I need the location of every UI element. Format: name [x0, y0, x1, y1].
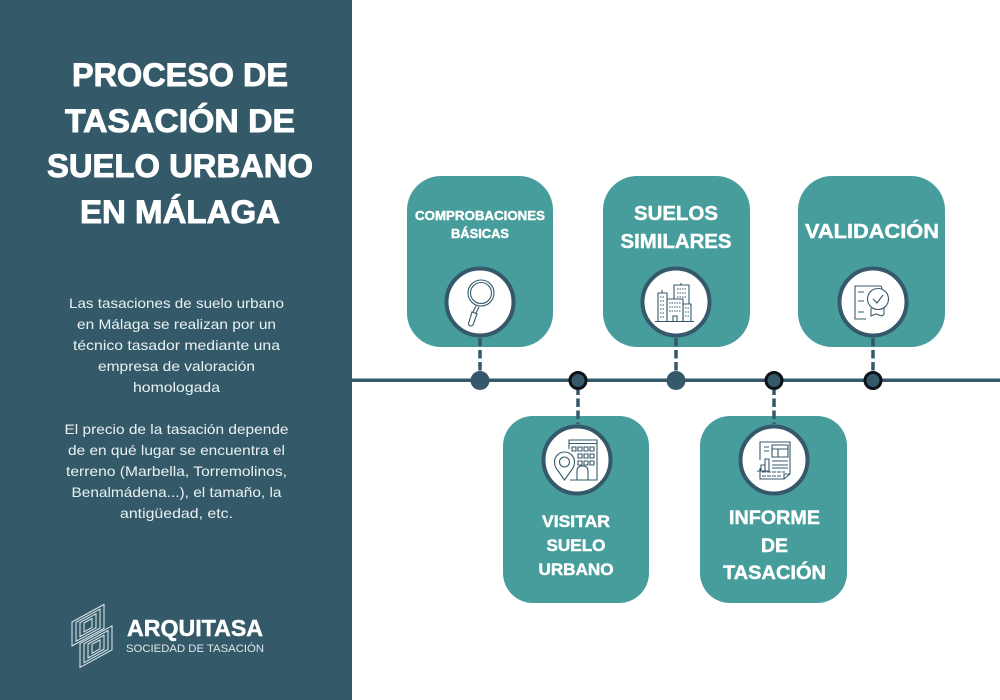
- heading: SUELO: [546, 537, 606, 555]
- heading: [723, 508, 826, 584]
- heading: [538, 513, 614, 579]
- icon: report: [740, 426, 808, 494]
- title: TASACIÓN DE: [65, 103, 295, 139]
- timeline: [352, 338, 1000, 424]
- heading: SIMILARES: [620, 231, 732, 253]
- text block: price paragraph: [64, 421, 289, 521]
- text block: price paragraph: El precio de la tasación depende: [64, 421, 289, 437]
- panel: informe de tasación: [700, 416, 847, 603]
- text block: intro paragraph: Las tasaciones de suelo urbano: [69, 295, 284, 311]
- timeline dot 1: [470, 371, 490, 390]
- text block: intro paragraph: [69, 295, 284, 395]
- panel: visitar suelo urbano: [503, 416, 649, 603]
- heading: SUELOS: [634, 203, 718, 225]
- panel: suelos similares: [603, 176, 750, 347]
- icon: logo mark: [72, 604, 112, 667]
- heading: BÁSICAS: [451, 226, 509, 241]
- icon: certificate: [840, 268, 906, 336]
- heading: [415, 208, 545, 241]
- heading: VISITAR: [542, 513, 610, 531]
- text block: intro paragraph: homologada: [133, 379, 220, 395]
- heading: TASACIÓN: [723, 562, 826, 584]
- text block: price paragraph: antigüedad, etc.: [120, 505, 233, 521]
- text block: price paragraph: Benalmádena...), el tamaño, la: [72, 484, 282, 500]
- panel: validación: [798, 176, 945, 347]
- connector dashes: [480, 338, 873, 424]
- text block: intro paragraph: técnico tasador mediante una: [73, 337, 280, 353]
- text block: intro paragraph: en Málaga se realizan por un: [77, 316, 276, 332]
- icon: magnifying glass: [446, 268, 514, 336]
- text block: price paragraph: de en qué lugar se encuentra el: [68, 442, 285, 458]
- timeline dot 5: [865, 372, 881, 388]
- text block: price paragraph: terreno (Marbella, Torremolinos,: [66, 463, 287, 479]
- text block: intro paragraph: empresa de valoración: [98, 358, 255, 374]
- tagline: SOCIEDAD DE TASACIÓN: [126, 642, 264, 655]
- brand name: ARQUITASA: [127, 615, 263, 641]
- title: [47, 57, 313, 230]
- icon: building with pin: [544, 426, 610, 494]
- heading: INFORME: [729, 508, 820, 529]
- heading: URBANO: [538, 561, 614, 579]
- heading: DE: [761, 536, 788, 557]
- timeline dot 2: [570, 372, 586, 388]
- timeline dot 3: [666, 371, 686, 390]
- timeline dot 4: [766, 372, 782, 388]
- panel: left sidebar: [0, 0, 352, 700]
- heading: VALIDACIÓN: [805, 219, 939, 243]
- heading: [620, 203, 732, 253]
- panel: comprobaciones básicas: [407, 176, 553, 347]
- logo: Arquitasa: [72, 604, 264, 667]
- title: SUELO URBANO: [47, 148, 313, 184]
- icon: city buildings: [642, 268, 710, 336]
- title: EN MÁLAGA: [80, 194, 280, 230]
- title: PROCESO DE: [72, 57, 288, 93]
- heading: COMPROBACIONES: [415, 208, 545, 223]
